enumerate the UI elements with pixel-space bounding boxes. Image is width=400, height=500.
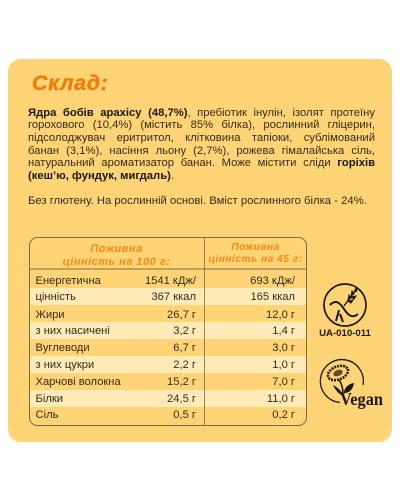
table body rows: 7,0 г [272, 376, 295, 388]
table body rows: 367 ккал [151, 291, 196, 303]
table body rows: Енергетична [36, 275, 101, 287]
table body rows: Жири [36, 308, 65, 320]
header: per 45 g: Поживна [231, 242, 280, 252]
table body rows: Харчові волокна [36, 376, 121, 388]
table body rows: 165 ккал [250, 291, 295, 303]
table body rows: 3,0 г [272, 342, 295, 354]
table body rows: Білки [36, 392, 63, 404]
ingredients text: підсолоджувач еритритол, клітковина тапіоки, сублімований [28, 132, 375, 144]
table body rows: Сіль [36, 409, 58, 421]
ingredients text: Ядра бобів арахісу (48,7%), пребіотик інулін, ізолят протеїну [28, 106, 375, 118]
icon: gluten free: UA-010-011 [319, 328, 372, 339]
panel: ingredients card [8, 59, 392, 442]
table body rows: з них цукри [36, 359, 94, 371]
ingredients text: натуральний ароматизатор банан. Може містити сліди горіхів [28, 157, 375, 169]
table body rows: 12,0 г [266, 308, 295, 320]
header: per 100 g: Поживна [90, 243, 143, 255]
ingredients text: банан (3,1%), насіння льону (2,7%), рожева гімалайська сіль, [28, 145, 375, 157]
table frame [29, 237, 307, 426]
table body rows: 1,0 г [272, 359, 295, 371]
table body rows: 1,4 г [272, 325, 295, 337]
header: per 45 g: цінність на 45 г: [208, 254, 303, 265]
ingredients text: горохового (10,4%) (містить 85% білка), рослинний гліцерин, [28, 119, 375, 131]
header: per 100 g [63, 243, 170, 268]
icon: gluten free [319, 283, 372, 339]
table body rows: 1541 кДж/ [145, 275, 196, 287]
table body rows: цінність [36, 291, 76, 303]
icon: vegan: Vegan [340, 389, 383, 409]
table body rows: Вуглеводи [36, 342, 90, 354]
ingredients text: (кеш’ю, фундук, мигдаль). [28, 170, 174, 182]
table body rows: 26,7 г [167, 308, 196, 320]
gluten-free note: Без глютену. На рослинній основі. Вміст рослинного білка - 24%. [28, 194, 367, 206]
table body rows: 3,2 г [173, 325, 196, 337]
table body rows: з них насичені [36, 325, 110, 337]
table body rows: 0,2 г [272, 409, 295, 421]
table body rows: 0,5 г [173, 409, 196, 421]
table body rows: 6,7 г [173, 342, 196, 354]
title: Склад: [32, 71, 108, 95]
table body rows: 693 кДж/ [250, 275, 295, 287]
header: per 45 g [208, 242, 303, 265]
table body rows: 2,2 г [173, 359, 196, 371]
header: per 100 g: цінність на 100 г: [63, 256, 170, 268]
table body rows: 24,5 г [167, 392, 196, 404]
nutrition table [29, 237, 307, 426]
icon: vegan [320, 358, 383, 409]
table body rows: 15,2 г [167, 376, 196, 388]
ingredients text [28, 106, 375, 182]
table body rows: 11,0 г [267, 392, 295, 404]
